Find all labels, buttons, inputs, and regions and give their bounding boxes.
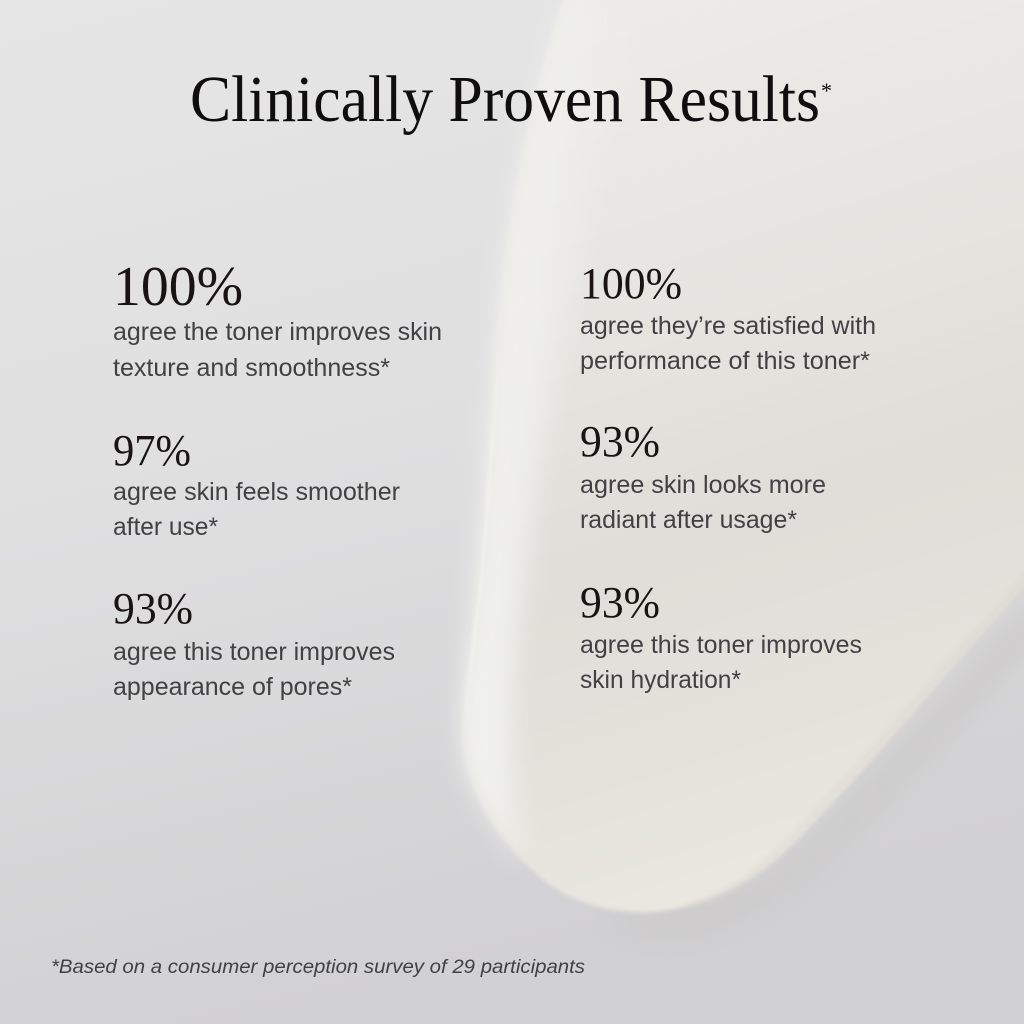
stat: 93% hydration: 93% [580, 578, 660, 627]
footnote: *Based on a consumer perception survey of 29 participants [51, 956, 585, 978]
stat: 93% pores: appearance of pores* [113, 673, 352, 701]
stat: 97% smoother [113, 426, 400, 541]
stat: 97% smoother: agree skin feels smoother [113, 478, 400, 506]
stat: 100% satisfied: performance of this toner* [580, 347, 870, 375]
stat: 93% radiant [580, 417, 826, 534]
stat: 100% texture and smoothness: texture and smoothness* [113, 354, 390, 382]
stat: 100% texture and smoothness [113, 256, 442, 382]
stat: 100% texture and smoothness: agree the toner improves skin [113, 318, 442, 346]
stat: 93% radiant: agree skin looks more [580, 471, 826, 499]
title: * [821, 78, 832, 103]
stat: 100% satisfied [580, 259, 876, 375]
stat: 93% hydration: agree this toner improves [580, 631, 862, 659]
stat: 100% satisfied: 100% [580, 259, 682, 308]
stat: 93% radiant: radiant after usage* [580, 506, 797, 534]
stat: 93% pores: 93% [113, 584, 193, 633]
stat: 93% radiant: 93% [580, 417, 660, 466]
stat: 93% pores [113, 584, 395, 701]
stat: 100% satisfied: agree they’re satisfied with [580, 312, 876, 340]
cream swatch [462, 0, 1024, 932]
stat: 93% hydration: skin hydration* [580, 666, 741, 694]
stat: 93% hydration [580, 578, 862, 694]
stat: 93% pores: agree this toner improves [113, 638, 395, 666]
stat: 100% texture and smoothness: 100% [113, 256, 243, 318]
stat: 97% smoother: after use* [113, 513, 218, 541]
title: Clinically Proven Results [190, 63, 820, 136]
stat: 97% smoother: 97% [113, 426, 191, 475]
